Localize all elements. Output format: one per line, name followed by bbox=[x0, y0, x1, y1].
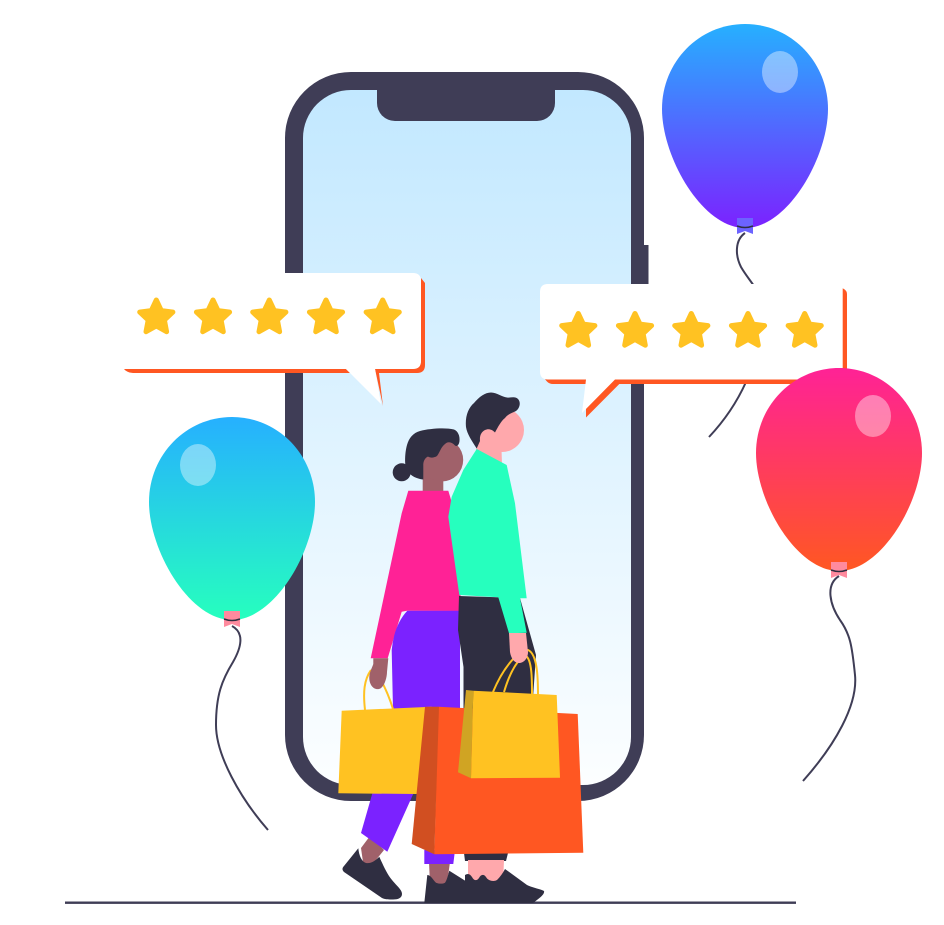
shopping bag: right yellow bbox=[458, 650, 560, 778]
man head and hair bbox=[466, 392, 524, 465]
star rating: left bbox=[140, 300, 399, 332]
balloon string: top balloon bbox=[709, 233, 754, 437]
balloon: left teal bbox=[149, 417, 315, 830]
man sweater bbox=[448, 449, 527, 633]
ground line bbox=[65, 902, 796, 904]
shopping bag: left yellow bbox=[338, 670, 432, 794]
balloon: top blue-violet bbox=[662, 24, 828, 234]
woman head and hair bbox=[393, 428, 463, 494]
speech bubble: right rating bbox=[540, 284, 847, 418]
phone bbox=[285, 72, 648, 801]
person: woman bbox=[342, 428, 472, 903]
shopping bag: large orange bbox=[412, 707, 583, 854]
man foot and shoe bbox=[465, 860, 544, 903]
woman legs and feet bbox=[342, 790, 472, 903]
person: man bbox=[448, 392, 544, 903]
woman sweater bbox=[371, 491, 462, 658]
woman trousers bbox=[392, 611, 460, 710]
woman hand bbox=[369, 658, 388, 689]
man hand bbox=[509, 633, 528, 663]
star rating: right bbox=[562, 314, 821, 345]
balloon: right pink-orange bbox=[756, 368, 922, 781]
speech bubble: left rating bbox=[120, 273, 425, 406]
man trousers bbox=[458, 596, 536, 712]
